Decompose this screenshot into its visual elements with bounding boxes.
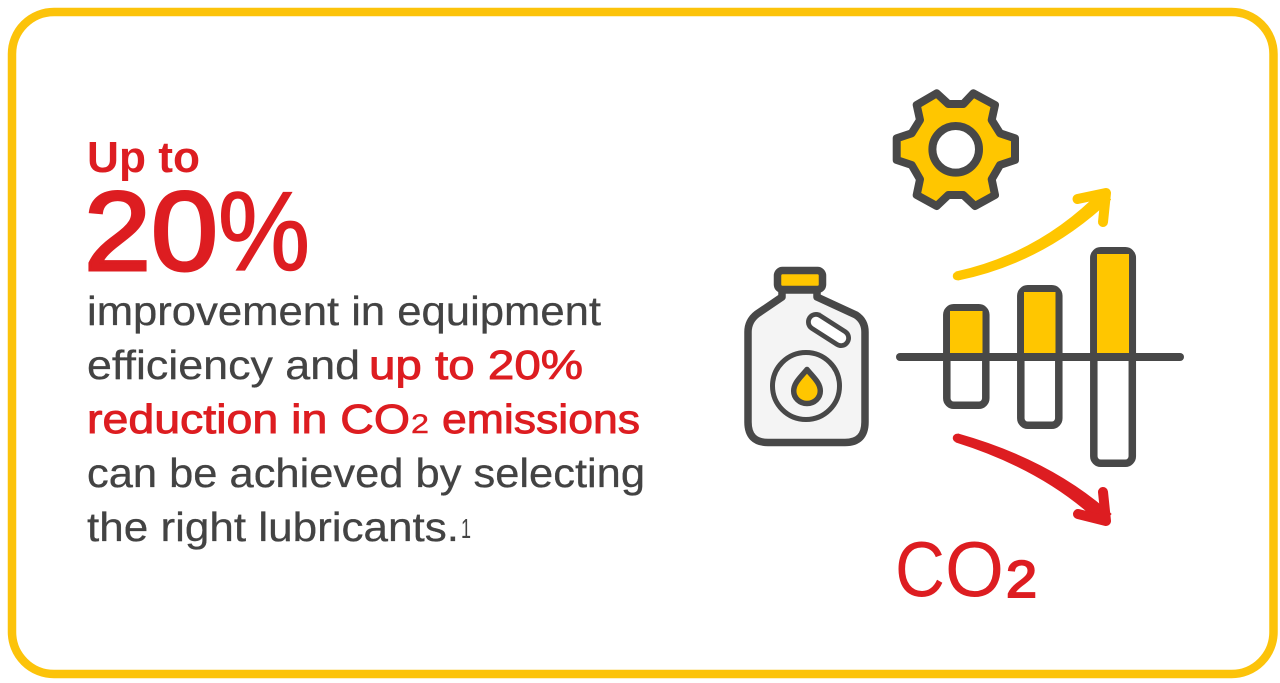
text line: up to 20%: up to 20% — [369, 342, 583, 388]
text line: efficiency: efficiency and — [87, 342, 360, 388]
text line: can be achieved: can be achieved by selecting — [87, 450, 645, 496]
heading: 20 percent — [84, 169, 310, 294]
label: CO2 — [895, 525, 1037, 613]
axis line — [900, 353, 1180, 361]
icon: gear — [897, 93, 1015, 206]
oil drop — [794, 370, 820, 404]
bar 2 — [1021, 289, 1059, 425]
arrow: red down — [956, 434, 1111, 524]
label: CO2: 2 — [1006, 551, 1037, 609]
arrow: yellow up — [956, 190, 1110, 280]
jug handle — [816, 322, 841, 338]
jug label circle — [772, 352, 840, 420]
text block: main statement — [84, 133, 645, 550]
text line: reduction: emissions — [442, 396, 640, 442]
text line: the right lubricants: 1 — [461, 513, 471, 544]
heading: 20 percent: % — [218, 169, 310, 294]
heading: 20 percent: 20 — [84, 169, 218, 294]
label: CO2: C — [895, 525, 945, 613]
heading: up to: Up to — [87, 133, 200, 182]
bar chart — [900, 251, 1180, 463]
icon: oil jug — [748, 270, 865, 442]
jug body — [748, 290, 865, 442]
text line: improvement: improvement in equipment — [87, 288, 602, 334]
text line: reduction: reduction in CO — [87, 396, 410, 442]
label: CO2: O — [945, 525, 1004, 613]
text line: reduction — [87, 396, 640, 442]
text line: the right lubricants: the right lubricants. — [87, 504, 459, 550]
bar 3 — [1094, 251, 1132, 463]
bar 1 — [947, 308, 986, 405]
jug cap — [778, 270, 822, 290]
text line: reduction: 2 — [411, 409, 429, 439]
